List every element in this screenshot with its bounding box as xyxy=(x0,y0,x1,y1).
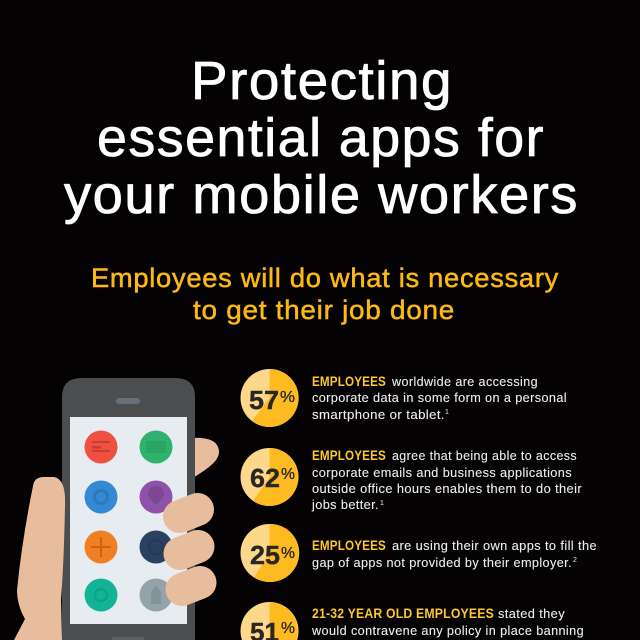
stat: 57%: % xyxy=(280,389,295,406)
pie chart xyxy=(240,602,298,640)
text block: outside office hours enables them to do their xyxy=(312,481,582,496)
icon: thumb xyxy=(14,477,65,640)
icon: back finger xyxy=(193,438,219,478)
text block xyxy=(312,374,567,422)
icon: purple pin app xyxy=(140,480,172,514)
text block: worldwide are accessing xyxy=(391,374,538,389)
text block: EMPLOYEES xyxy=(312,448,386,463)
subheading: Employees will do what is necessary xyxy=(91,263,559,293)
text block: EMPLOYEES xyxy=(312,374,386,389)
subheading xyxy=(91,263,559,325)
stat: 25%: 25 xyxy=(250,540,280,570)
title: Protecting xyxy=(191,51,453,111)
text block: would contravene any policy in place banning xyxy=(311,623,584,638)
text block xyxy=(312,538,597,570)
phone body xyxy=(62,378,195,640)
text block: 1 xyxy=(380,500,384,507)
text block: smartphone or tablet. xyxy=(312,407,445,422)
illustration: hand holding phone xyxy=(14,378,219,640)
text block: gap of apps not provided by their employer. xyxy=(312,555,572,570)
stat: 57% xyxy=(240,369,567,427)
icon: blue gear app xyxy=(84,480,118,514)
stat: 62%: % xyxy=(281,466,295,483)
stat: 62% xyxy=(240,448,582,512)
phone speaker xyxy=(116,398,140,404)
pie chart xyxy=(240,369,299,427)
text block: EMPLOYEES xyxy=(312,538,386,553)
title: your mobile workers xyxy=(64,165,579,225)
stat: 51%: % xyxy=(281,620,295,637)
text block xyxy=(311,606,584,638)
icon: fingers xyxy=(180,510,200,590)
icon: navy app xyxy=(140,530,172,564)
stat: 25%: % xyxy=(281,545,295,562)
title xyxy=(64,51,579,225)
icon: grey app xyxy=(140,578,172,612)
text block: jobs better. xyxy=(311,497,379,512)
text block: stated they xyxy=(498,606,565,621)
text block: 2 xyxy=(573,557,577,564)
stat: 62%: 62 xyxy=(250,463,280,493)
text block: are using their own apps to fill the xyxy=(392,538,597,553)
stat: 51% xyxy=(240,602,584,640)
text block: 1 xyxy=(445,409,449,416)
icon: orange plus app xyxy=(84,530,118,564)
stat: 57%: 57 xyxy=(249,385,279,415)
subheading: to get their job done xyxy=(193,295,455,325)
text block xyxy=(311,448,582,512)
icon: teal app xyxy=(84,578,118,612)
text block: agree that being able to access xyxy=(392,448,577,463)
phone screen xyxy=(70,417,187,624)
text block: 21-32 YEAR OLD EMPLOYEES xyxy=(312,606,494,621)
title: essential apps for xyxy=(97,108,545,168)
pie chart xyxy=(240,448,298,506)
icon: red app xyxy=(84,430,118,464)
pie chart xyxy=(240,524,299,582)
icon: green app xyxy=(140,430,172,464)
phone home button xyxy=(112,637,144,640)
text block: corporate data in some form on a personal xyxy=(312,390,567,405)
text block: corporate emails and business applications xyxy=(312,465,572,480)
stat: 25% xyxy=(240,524,597,582)
